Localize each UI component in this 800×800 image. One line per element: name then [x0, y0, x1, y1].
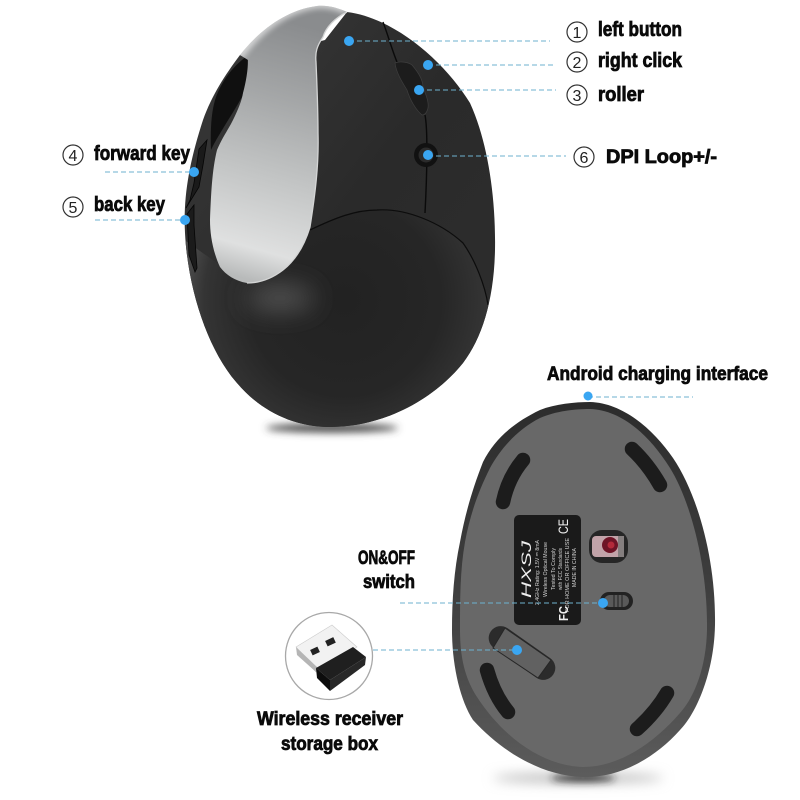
product label: FOR HOME OR OFFICE USE [565, 538, 571, 612]
foot pads [487, 449, 667, 729]
sensor [589, 530, 628, 563]
callout: forward key: forward key [94, 143, 191, 165]
silver thumb panel [210, 4, 347, 283]
callout: Android charging interface [547, 364, 768, 400]
callout: DPI loop: 6 [580, 150, 589, 167]
callout: ON&OFF switch: ON&OFF [358, 548, 415, 569]
callout: DPI loop [423, 147, 717, 168]
callout: ON&OFF switch: switch [363, 572, 415, 593]
icon: side buttons [186, 140, 207, 272]
product label: with FCC Standards [558, 548, 564, 591]
bottom mouse: underside view [452, 402, 715, 783]
icon: scroll wheel [395, 62, 428, 115]
callout: right click [423, 50, 683, 72]
callout: wireless receiver storage box: Wireless receiver [257, 709, 404, 730]
product label: HXSJ [518, 539, 534, 598]
product label: Wireless Optical Mouse [543, 542, 549, 597]
callout: right click: right click [598, 50, 683, 72]
receiver storage box [484, 621, 560, 685]
callout: left button: left button [598, 19, 682, 41]
callout: forward key: 4 [69, 148, 78, 165]
callout: forward key [63, 143, 199, 177]
icon: DPI button [414, 143, 438, 167]
callout: back key [63, 194, 190, 225]
callout: wireless receiver storage box: storage box [281, 734, 378, 755]
callout: roller [414, 84, 644, 106]
callout: Android charging interface: Android charging interface [547, 364, 768, 385]
receiver circle with USB dongle [286, 612, 372, 700]
product label [514, 515, 581, 625]
callout: back key: 5 [69, 200, 78, 217]
on/off switch [600, 592, 633, 610]
product label: CE [555, 519, 571, 534]
callout: roller: roller [598, 84, 644, 106]
product label: Tested To Comply [551, 548, 557, 590]
center seam [383, 22, 427, 213]
product label: FC [556, 605, 571, 621]
top mouse: side view [170, 4, 500, 450]
callout: ON&OFF switch [358, 548, 608, 608]
callout: roller: 3 [573, 88, 582, 105]
product label: 2.4GHz Rating: 1.5V ⎓ 8mA [535, 540, 541, 605]
callout: left button: 1 [573, 25, 582, 42]
callout: right click: 2 [573, 55, 582, 72]
product label: MADE IN CHINA [572, 548, 578, 587]
callout: left button [344, 19, 682, 46]
callout: wireless receiver storage box [257, 645, 522, 755]
callout: DPI loop: DPI Loop+/- [606, 147, 717, 168]
callout: back key: back key [94, 194, 166, 216]
